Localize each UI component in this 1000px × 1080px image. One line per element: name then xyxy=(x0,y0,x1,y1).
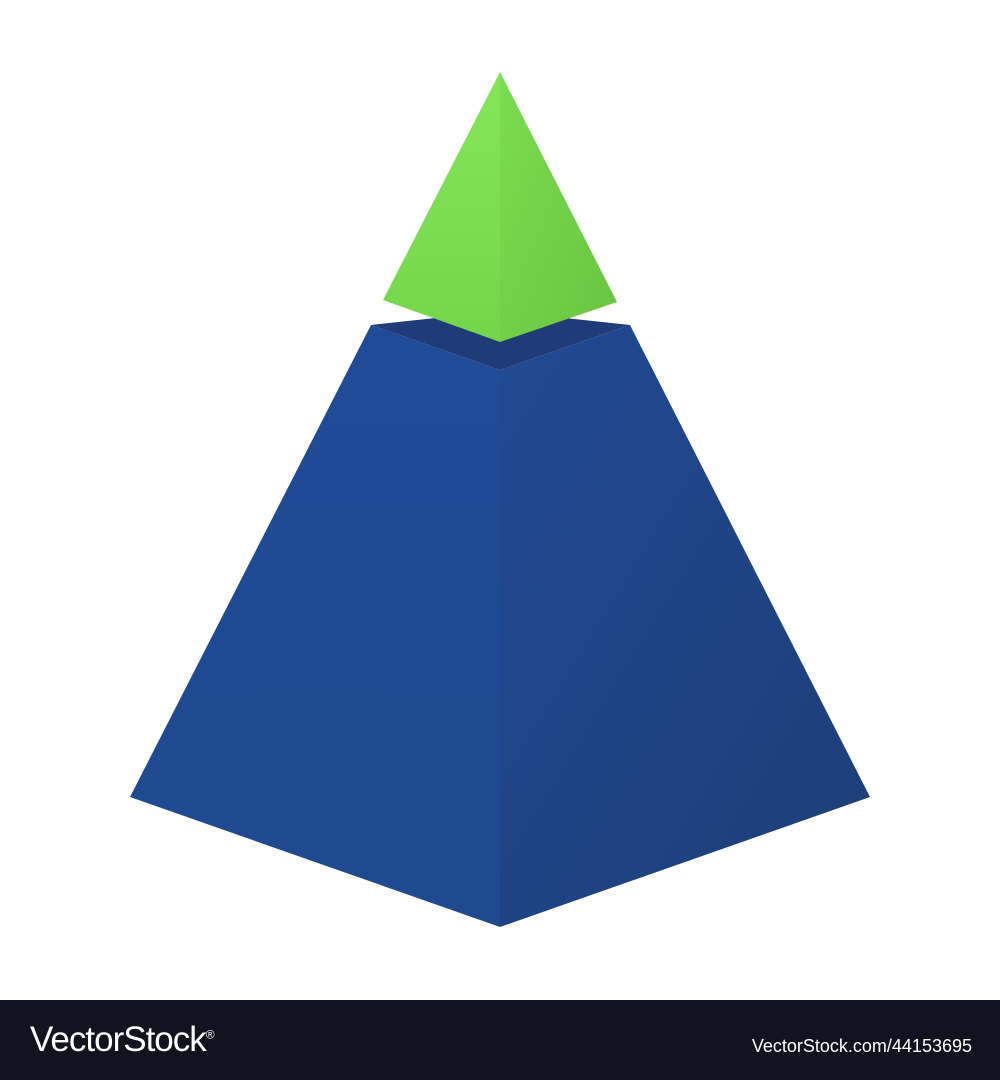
green pyramid tip xyxy=(383,72,617,342)
footer bar xyxy=(0,1000,1000,1080)
footer logo: VectorStock® xyxy=(30,1020,214,1059)
footer id: VectorStock.com/44153695 xyxy=(752,1036,972,1056)
blue pyramid base xyxy=(130,311,870,927)
